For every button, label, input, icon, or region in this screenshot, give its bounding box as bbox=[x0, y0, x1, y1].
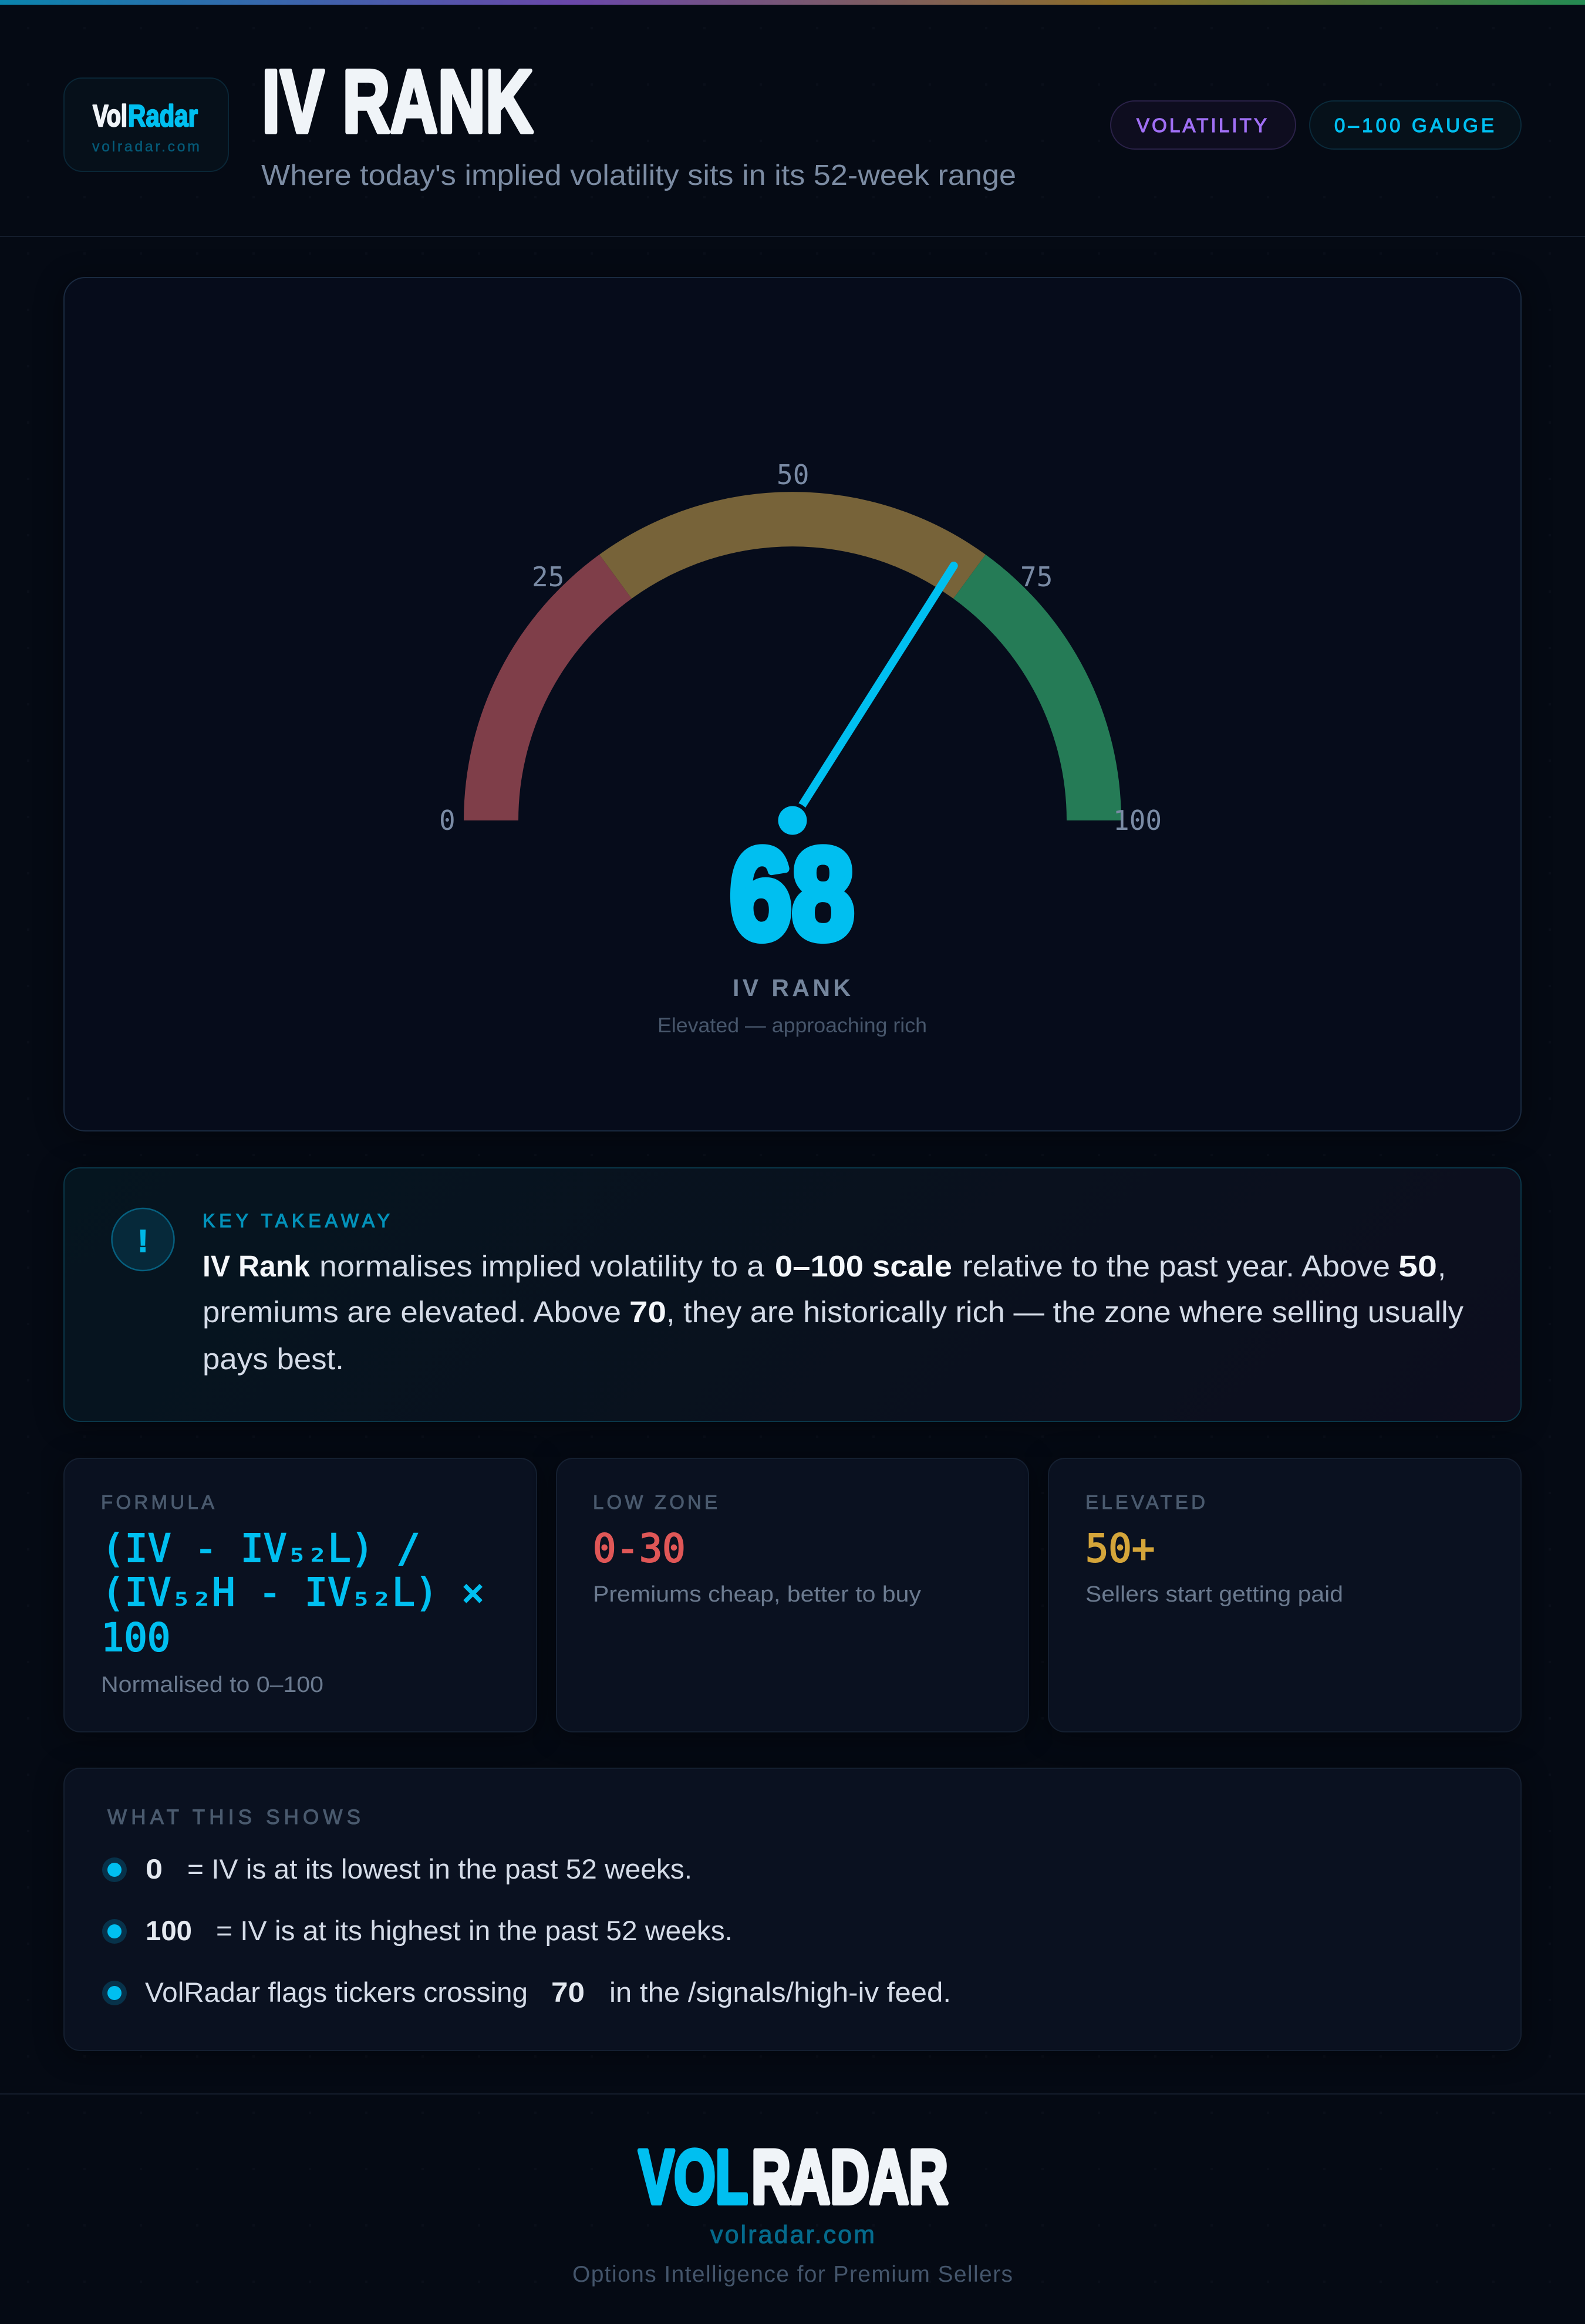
formula bbox=[101, 1526, 484, 1660]
takeaway text bbox=[203, 1249, 1464, 1376]
takeaway text: , bbox=[1438, 1249, 1446, 1283]
card label: ELEVATED bbox=[1085, 1491, 1205, 1513]
scale label 75: 75 bbox=[1020, 561, 1053, 593]
value: 50+ bbox=[1085, 1526, 1155, 1571]
pill: volatility: VOLATILITY bbox=[1137, 114, 1267, 136]
scale label 100: 100 bbox=[1113, 805, 1162, 836]
bullet 3: 70 bbox=[551, 1977, 585, 2008]
value: 0-30 bbox=[593, 1526, 686, 1571]
formula: 100 bbox=[101, 1616, 170, 1660]
bullet 1: = IV is at its lowest in the past 52 weeks. bbox=[187, 1853, 692, 1884]
logo badge: volradar.com bbox=[92, 139, 200, 155]
gauge arc: mid zone bbox=[599, 492, 986, 599]
header bbox=[64, 52, 1521, 191]
footer tagline: Options Intelligence for Premium Sellers bbox=[572, 2262, 1013, 2287]
footer url: volradar.com bbox=[710, 2221, 875, 2249]
formula: (IV₅₂H - IV₅₂L) × bbox=[102, 1570, 484, 1615]
gauge arc: high zone bbox=[953, 555, 1121, 820]
scale label 50: 50 bbox=[777, 459, 809, 491]
card label: FORMULA bbox=[101, 1491, 214, 1513]
panel: gauge bbox=[64, 278, 1521, 1131]
footer bbox=[572, 2134, 1013, 2287]
panel: what this shows bbox=[64, 1768, 1521, 2051]
logo badge: Vol bbox=[93, 99, 127, 133]
scale label 25: 25 bbox=[532, 561, 564, 593]
logo badge: Radar bbox=[128, 99, 198, 133]
card: low zone bbox=[557, 1458, 1028, 1732]
panel heading: WHAT THIS SHOWS bbox=[107, 1806, 360, 1829]
takeaway text: pays best. bbox=[203, 1342, 344, 1376]
formula note: Normalised to 0–100 bbox=[101, 1673, 323, 1697]
pill: gauge: 0–100 GAUGE bbox=[1334, 114, 1494, 136]
gauge label: IV RANK bbox=[733, 974, 851, 1001]
takeaway text: 50 bbox=[1398, 1249, 1437, 1283]
takeaway text: normalises implied volatility to a bbox=[319, 1249, 765, 1283]
bullet 1: 0 bbox=[146, 1853, 163, 1884]
note: Premiums cheap, better to buy bbox=[593, 1582, 921, 1607]
hub bbox=[774, 802, 811, 839]
bullet 3: VolRadar flags tickers crossing bbox=[145, 1977, 528, 2008]
value: 68 bbox=[730, 822, 854, 966]
takeaway text: 0–100 scale bbox=[775, 1249, 952, 1283]
takeaway text: 70 bbox=[629, 1295, 666, 1329]
icon: alert: ! bbox=[138, 1224, 148, 1259]
scale label 0: 0 bbox=[439, 805, 456, 836]
pill: gauge bbox=[1310, 101, 1521, 149]
title: IV RANK bbox=[262, 52, 533, 151]
footer logo bbox=[639, 2134, 948, 2220]
takeaway text: premiums are elevated. Above bbox=[203, 1295, 621, 1329]
card label: LOW ZONE bbox=[593, 1491, 717, 1513]
logo badge bbox=[64, 78, 228, 171]
needle bbox=[792, 566, 954, 820]
subtitle: Where today's implied volatility sits in its 52-week range bbox=[261, 160, 1016, 191]
note: Sellers start getting paid bbox=[1085, 1582, 1343, 1607]
card: formula bbox=[64, 1458, 537, 1732]
footer logo: VOL bbox=[639, 2134, 748, 2220]
footer logo: RADAR bbox=[751, 2134, 948, 2220]
takeaway text: , they are historically rich — the zone where selling usually bbox=[666, 1295, 1464, 1329]
formula: (IV - IV₅₂L) / bbox=[102, 1526, 420, 1571]
bullet 2: 100 bbox=[146, 1915, 192, 1946]
panel: key takeaway bbox=[64, 1168, 1521, 1421]
card: elevated bbox=[1048, 1458, 1521, 1732]
pill: volatility bbox=[1111, 101, 1296, 149]
bullet 3: in the /signals/high-iv feed. bbox=[609, 1977, 951, 2008]
takeaway label: KEY TAKEAWAY bbox=[203, 1210, 390, 1231]
bullet 2: = IV is at its highest in the past 52 weeks. bbox=[216, 1915, 733, 1946]
takeaway text: IV Rank bbox=[203, 1249, 311, 1283]
icon: alert bbox=[112, 1208, 174, 1271]
gauge arc: low zone bbox=[464, 555, 632, 820]
takeaway text: relative to the past year. Above bbox=[962, 1249, 1390, 1283]
bullet 3 bbox=[102, 1977, 951, 2008]
gauge note: Elevated — approaching rich bbox=[657, 1014, 927, 1037]
